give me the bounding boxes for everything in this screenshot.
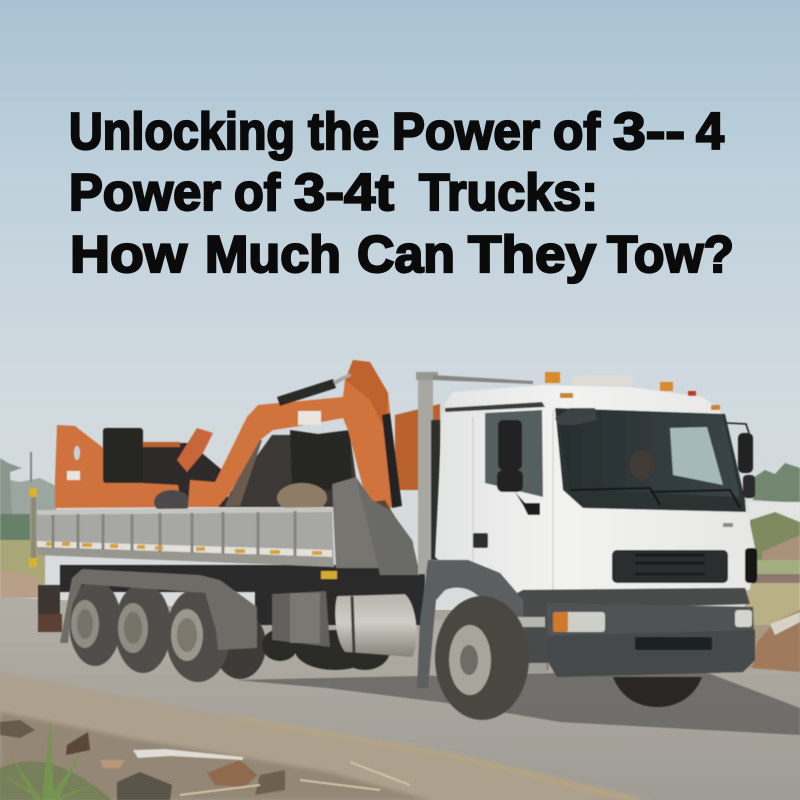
front wheels: [435, 596, 702, 720]
sky: [0, 0, 800, 610]
title line 3: Much: [205, 226, 341, 284]
truck shadow: [235, 670, 800, 735]
title line 3: They: [468, 226, 596, 284]
title line 1: [69, 103, 724, 161]
title line 3: [70, 226, 734, 284]
debris: [0, 720, 410, 800]
title line 2: 3-4t: [294, 164, 394, 222]
title line 1: 3--: [613, 103, 685, 161]
title line 2: Trucks:: [419, 164, 598, 222]
title line 2: of: [234, 164, 281, 222]
title line 1: the: [308, 103, 379, 161]
rear wheels: [69, 580, 390, 682]
distant trees and horizon: [0, 452, 800, 672]
road: [0, 597, 800, 800]
title line 1: Power: [392, 103, 540, 161]
title line 1: 4: [696, 103, 724, 161]
cab: [435, 372, 757, 595]
title line 3: Can: [357, 226, 455, 284]
fuel tanks: [272, 591, 417, 657]
foreground dirt: [0, 672, 650, 800]
bumper and front wheel arch: [417, 560, 755, 688]
title line 2: [69, 164, 598, 222]
plant: [0, 720, 112, 800]
mudguard: [60, 569, 257, 650]
truck flatbed: [29, 372, 533, 632]
title line 1: of: [553, 103, 601, 161]
cargo: orange excavator load: [55, 360, 440, 565]
title line 2: Power: [69, 164, 221, 222]
title line 1: Unlocking: [69, 103, 295, 161]
title line 3: Tow?: [607, 226, 734, 284]
title line 3: How: [70, 226, 188, 284]
